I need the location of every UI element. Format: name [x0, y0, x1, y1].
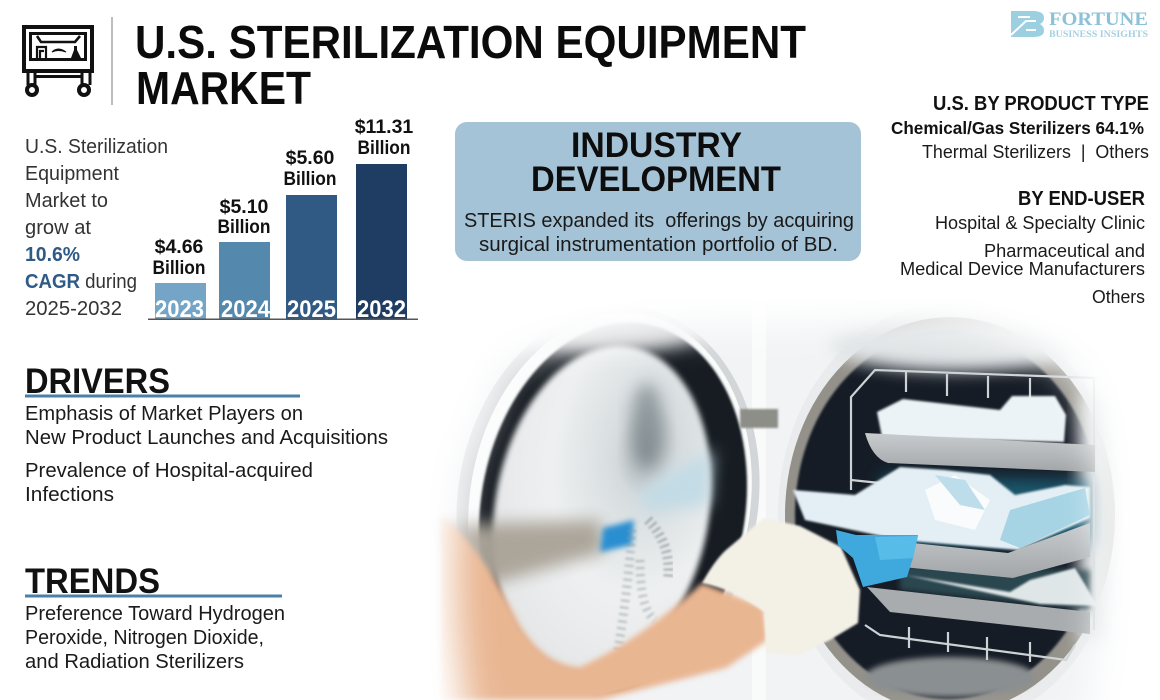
- machine body: [604, 326, 1093, 700]
- photo: sterilizer with gloved hand: [438, 316, 1115, 700]
- callout: industry development: surgical instrumentation portfolio of BD.: [479, 234, 838, 256]
- title: MARKET: [136, 62, 311, 114]
- text: CAGR summary: grow at: [25, 217, 91, 239]
- segments: end-user: BY END-USER: [1018, 188, 1146, 210]
- trends: Preference Toward Hydrogen: [25, 603, 285, 625]
- bar chart: market size: $5.10: [220, 196, 269, 218]
- divider: [111, 17, 113, 105]
- drivers: New Product Launches and Acquisitions: [25, 427, 388, 449]
- bar chart: market size: 2023: [155, 296, 204, 323]
- callout: industry development: INDUSTRY: [571, 126, 742, 165]
- text: CAGR summary: 2025-2032: [25, 298, 122, 320]
- trends: [25, 562, 285, 673]
- bar chart: market size: $11.31: [355, 116, 413, 138]
- glove: [702, 518, 860, 655]
- bar chart: market size: $4.66: [155, 236, 204, 258]
- title: U.S. STERILIZATION EQUIPMENT: [135, 16, 806, 68]
- trends: TRENDS: [25, 562, 160, 601]
- segments: product type: [891, 93, 1149, 162]
- drivers: Infections: [25, 484, 114, 506]
- text: CAGR summary: Market to: [25, 190, 108, 212]
- middle tray: [903, 523, 1090, 578]
- bar chart: market size: Billion: [218, 216, 270, 238]
- text: CAGR summary: CAGR during: [25, 271, 137, 293]
- bar chart: market size: 2025: [287, 296, 336, 323]
- bar chart: market size: $5.60: [286, 147, 335, 169]
- trends: Peroxide, Nitrogen Dioxide,: [25, 627, 264, 649]
- title: [135, 16, 806, 114]
- left door: [452, 323, 760, 692]
- drivers: Prevalence of Hospital-acquired: [25, 460, 313, 482]
- segments: end-user: Hospital & Specialty Clinic: [935, 213, 1145, 233]
- middle tray contents: [793, 467, 1090, 550]
- text: CAGR summary: U.S. Sterilization: [25, 136, 168, 158]
- segments: end-user: Others: [1092, 287, 1145, 307]
- trends: and Radiation Sterilizers: [25, 651, 244, 673]
- callout: industry development: DEVELOPMENT: [531, 160, 781, 199]
- drivers: Emphasis of Market Players on: [25, 403, 303, 425]
- hinge: [740, 409, 778, 428]
- drivers: DRIVERS: [25, 362, 170, 401]
- logo: Fortune Business Insights: [1011, 10, 1148, 40]
- drivers: [25, 362, 388, 506]
- upper rack: [851, 370, 1095, 630]
- top tray packages: [877, 396, 1066, 442]
- text: CAGR summary: 10.6%: [25, 244, 80, 266]
- callout: industry development: [455, 122, 861, 261]
- bar chart: market size: Billion: [152, 257, 206, 279]
- logo: Fortune Business Insights: BUSINESS INSIGHTS: [1049, 30, 1148, 40]
- lower rack: [865, 625, 1075, 662]
- arm: [440, 515, 768, 700]
- text: CAGR summary: [25, 136, 168, 320]
- segments: product type: Thermal Sterilizers | Others: [922, 142, 1149, 162]
- lower tray: [867, 587, 1090, 634]
- logo: Fortune Business Insights: FORTUNE: [1049, 10, 1148, 30]
- bar chart: market size: Billion: [358, 137, 410, 159]
- bar chart: market size: 2024: [221, 296, 271, 323]
- bar chart: market size: Billion: [284, 168, 336, 190]
- text: CAGR summary: Equipment: [25, 163, 119, 185]
- bar chart: market size: [148, 116, 418, 323]
- blue handle: [836, 530, 918, 587]
- icon: sterilizer cart: [22, 25, 94, 95]
- segments: product type: Chemical/Gas Sterilizers 64.1%: [891, 118, 1144, 138]
- chamber opening: [778, 303, 1122, 700]
- segments: end-user: [900, 188, 1146, 307]
- callout: industry development: STERIS expanded its offerings by acquiring: [464, 210, 854, 232]
- top tray: [865, 433, 1095, 472]
- segments: end-user: Pharmaceutical and: [984, 241, 1145, 261]
- lower packages: [905, 568, 1098, 606]
- segments: end-user: Medical Device Manufacturers: [900, 259, 1145, 279]
- bar chart: market size: 2032: [357, 296, 406, 323]
